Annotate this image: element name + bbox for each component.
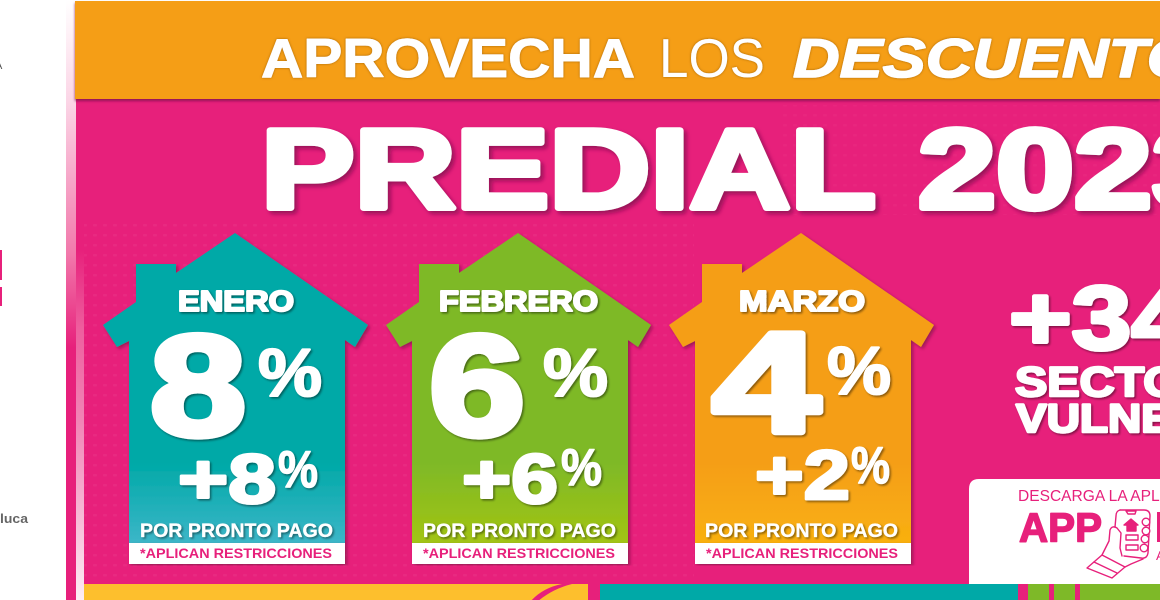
left edge page fragments: luca: [0, 511, 29, 526]
app label: APP: [1019, 504, 1102, 550]
main title: [261, 106, 1160, 232]
restrictions strip: *APLICAN RESTRICCIONES: [140, 545, 332, 561]
restrictions strip: [695, 543, 911, 564]
vulnerable sectors callout: SECTO: [1015, 358, 1160, 405]
panel: bottom color bands: [84, 584, 1160, 600]
discount figure: 4: [712, 304, 820, 463]
vulnerable sectors callout: +34: [1009, 269, 1160, 369]
restrictions strip: [412, 543, 628, 564]
discount figure: +2: [755, 436, 850, 514]
vulnerable sectors callout: VULNE: [1016, 397, 1160, 441]
panel: pink background: [84, 99, 1160, 600]
house: febrero: [386, 233, 651, 564]
discount figure: %: [278, 441, 318, 499]
prompt payment label: POR PRONTO PAGO: [705, 521, 898, 542]
month label: ENERO: [178, 286, 294, 318]
house shape: [103, 233, 368, 543]
prompt payment label: POR PRONTO PAGO: [423, 521, 616, 542]
house shape: [386, 233, 651, 543]
discount figure: %: [561, 439, 602, 497]
discount figure: 6: [429, 307, 525, 466]
discount figure: +8: [178, 440, 276, 518]
clipped next word: [1157, 512, 1160, 542]
panel: app download card: [969, 479, 1160, 584]
discount figure: %: [258, 335, 322, 411]
discount figure: %: [827, 333, 891, 409]
month label: FEBRERO: [439, 286, 598, 318]
discount figure: [429, 307, 608, 518]
main title: PREDIAL: [261, 106, 876, 232]
discount figure: 8: [150, 307, 246, 466]
banner heading: DESCUENTO: [793, 28, 1160, 89]
banner heading: LOS: [659, 28, 765, 89]
discount figure: +6: [462, 440, 558, 518]
icon: hand holding phone: [1087, 510, 1150, 578]
discount figure: [150, 307, 322, 518]
discount figure: [712, 304, 891, 514]
banner heading: APROVECHA: [261, 28, 635, 89]
prompt payment label: POR PRONTO PAGO: [140, 521, 333, 542]
panel: orange banner: [75, 1, 1160, 99]
restrictions strip: *APLICAN RESTRICCIONES: [706, 545, 898, 561]
discount figure: %: [851, 437, 890, 495]
banner heading: [261, 28, 1160, 89]
month label: MARZO: [739, 286, 865, 318]
discount figure: %: [543, 335, 608, 411]
house shape: [669, 233, 934, 543]
house: marzo: [669, 233, 934, 564]
gradient side strips: [66, 0, 84, 600]
left edge page fragments: [0, 60, 29, 526]
vulnerable sectors callout: [1009, 269, 1160, 441]
arc detail: [530, 584, 572, 600]
restrictions strip: [129, 543, 345, 564]
download text: DESCARGA LA APLI: [1018, 488, 1160, 505]
restrictions strip: *APLICAN RESTRICCIONES: [423, 545, 615, 561]
house: enero: [103, 233, 368, 564]
